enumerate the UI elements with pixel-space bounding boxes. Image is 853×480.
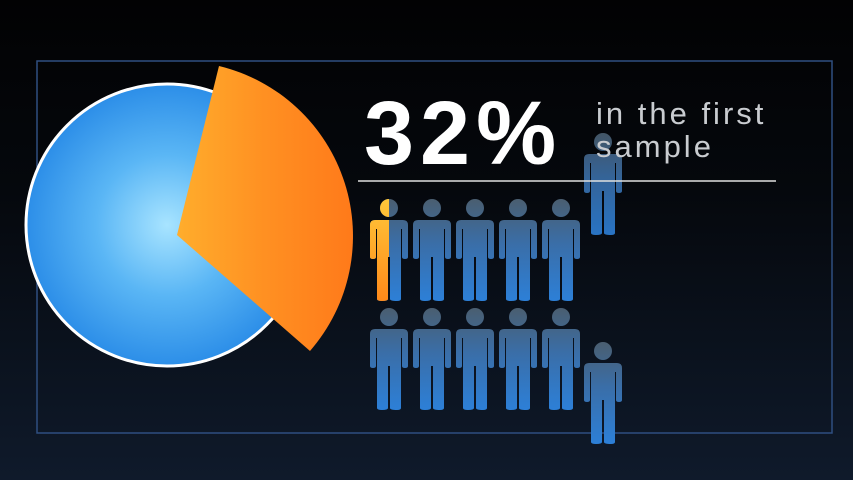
pie: orange exploded slice: [177, 66, 353, 351]
pie chart: [26, 66, 353, 366]
headline percentage: 32%: [364, 84, 562, 184]
frame: [37, 61, 832, 433]
caption: sample: [596, 129, 714, 164]
caption: in the first: [596, 96, 766, 131]
people grid: [370, 133, 622, 444]
highlighted person: [370, 199, 408, 301]
pie: blue base: [26, 84, 308, 366]
divider line: [358, 180, 776, 182]
